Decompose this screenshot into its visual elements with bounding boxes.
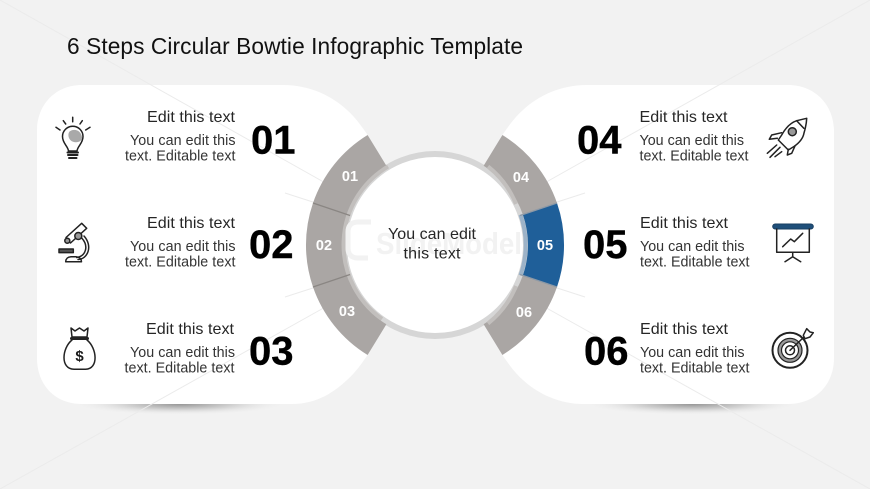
step 05 text: 05: [583, 223, 628, 267]
step 04 text: Edit this text: [640, 108, 728, 126]
step 06 text: Edit this text: [640, 320, 729, 338]
step 03 text: You can edit this: [130, 345, 235, 361]
segment 02: 02: [316, 238, 332, 254]
step 05 text: [583, 214, 750, 270]
step 02 text: You can edit this: [130, 239, 236, 255]
segment 01: 01: [342, 169, 358, 185]
segment 03: [313, 275, 386, 355]
step 04 text: text. Editable text: [640, 148, 749, 164]
panel: right: [435, 85, 834, 404]
icon: microscope: [59, 223, 89, 262]
icon: presentation board: [773, 224, 813, 262]
segment 06: 06: [516, 305, 532, 321]
segment 06: [484, 275, 557, 355]
watermark: [348, 222, 522, 261]
step 01 text: text. Editable text: [125, 148, 236, 164]
step 01 text: Edit this text: [147, 108, 236, 126]
icon: rocket: [767, 118, 807, 157]
step 03 text: text. Editable text: [124, 360, 235, 376]
step 04 text: [577, 108, 749, 164]
segment 01: [313, 135, 386, 215]
center ring: [344, 154, 526, 336]
watermark: SlideModel: [376, 226, 522, 261]
step 02 text: Edit this text: [147, 214, 236, 232]
step 02 text: [125, 214, 294, 270]
circular bowtie segments: [306, 135, 564, 355]
segment 02: [306, 203, 347, 287]
step 01 text: 01: [251, 118, 296, 162]
panel shadow: left: [72, 393, 288, 415]
step 05 text: Edit this text: [640, 214, 729, 232]
center text: You can edit: [388, 226, 477, 243]
step 06 text: You can edit this: [640, 345, 744, 361]
center text: [388, 226, 477, 262]
step 04 text: 04: [577, 118, 622, 162]
panel shadow: right: [584, 393, 800, 415]
step 04 text: You can edit this: [640, 133, 744, 149]
segment 04: 04: [513, 170, 529, 186]
segment 05: [523, 203, 564, 287]
step 01 text: [125, 108, 296, 164]
step 03 text: 03: [249, 330, 294, 374]
icon: money bag: [64, 328, 95, 369]
step 03 text: [124, 320, 294, 376]
panel: left: [37, 85, 435, 404]
segment 03: 03: [339, 304, 355, 320]
center text: this text: [404, 246, 461, 262]
step 03 text: Edit this text: [146, 320, 235, 338]
step 02 text: 02: [249, 223, 294, 267]
segment 05: 05: [537, 238, 553, 254]
step 05 text: text. Editable text: [640, 254, 750, 270]
icon: light bulb: [56, 117, 90, 158]
dollar sign: $: [75, 348, 84, 365]
step 06 text: text. Editable text: [640, 360, 750, 376]
step 05 text: You can edit this: [640, 239, 744, 255]
step 02 text: text. Editable text: [125, 254, 236, 270]
step 01 text: You can edit this: [130, 133, 236, 149]
title: 6 Steps Circular Bowtie Infographic Template: [67, 33, 523, 59]
segment 04: [484, 135, 557, 215]
step 06 text: 06: [584, 330, 628, 374]
icon: target: [772, 329, 813, 368]
step 06 text: [584, 320, 750, 376]
